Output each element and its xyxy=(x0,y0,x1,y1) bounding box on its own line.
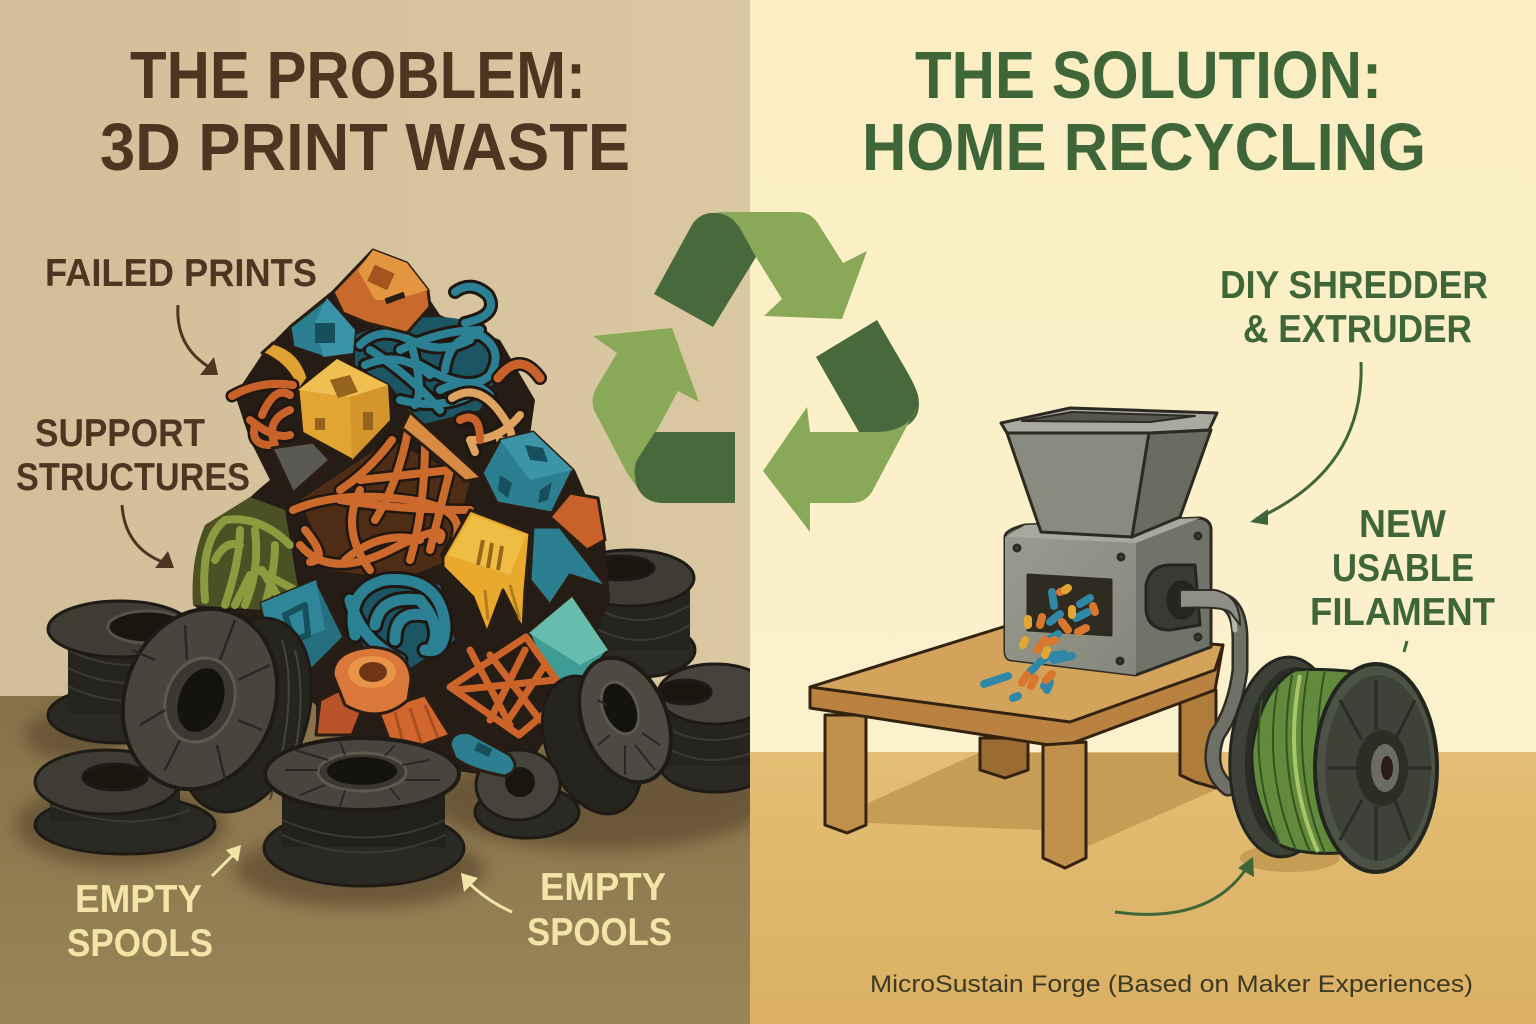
blue underlayer upper xyxy=(355,317,497,425)
panel: problem background xyxy=(0,0,750,1024)
label: failed prints: FAILED PRINTS xyxy=(45,252,317,295)
heading: the solution: HOME RECYCLING xyxy=(862,110,1426,185)
arrow: filament tick xyxy=(1404,641,1407,652)
panel: solution background xyxy=(750,0,1536,1024)
label: support structures: SUPPORT xyxy=(35,412,205,455)
failed print: orange ring xyxy=(316,647,450,755)
label: empty spools right: EMPTY xyxy=(540,866,666,909)
heading: the problem: THE PROBLEM: xyxy=(130,38,586,113)
heading: the solution xyxy=(862,38,1426,185)
orange tangle right xyxy=(452,364,540,452)
hopper xyxy=(1001,408,1217,537)
arrow: empty spools left xyxy=(212,845,241,876)
label: empty spools right: SPOOLS xyxy=(527,911,672,954)
scrap spool ring xyxy=(475,750,579,838)
failed print: blue block xyxy=(261,580,344,670)
orange underlayer xyxy=(300,440,470,580)
arrow: empty spools right xyxy=(461,873,512,912)
failed print: yellow cube xyxy=(298,359,390,460)
arrow: support structures xyxy=(122,505,174,568)
illustration: waste pile xyxy=(15,250,772,908)
illustration: shredder on table xyxy=(810,408,1240,868)
empty spool: tilted large xyxy=(121,608,312,814)
empty spool: back left xyxy=(48,601,193,743)
empty spool: low left xyxy=(35,750,215,854)
heading: the problem xyxy=(100,38,630,185)
label: support structures: STRUCTURES xyxy=(16,456,250,499)
scrap behind ring xyxy=(316,705,318,722)
failed print: blue cube xyxy=(482,432,573,513)
label: empty spools left xyxy=(67,878,213,965)
blue tangle lower xyxy=(350,580,445,660)
label: DIY shredder and extruder: DIY SHREDDER xyxy=(1220,264,1488,307)
output tube xyxy=(1182,596,1240,788)
blue fragment xyxy=(450,732,515,776)
label: new usable filament: NEW xyxy=(1359,503,1446,546)
floor shadows xyxy=(15,710,770,908)
teal drape xyxy=(532,528,603,602)
arrow: shredder xyxy=(1250,362,1361,525)
label: new usable filament: FILAMENT xyxy=(1310,591,1495,634)
failed print: yellow drip cube xyxy=(443,510,530,633)
shredder body xyxy=(1005,518,1211,675)
failed print: dark wedge xyxy=(272,442,330,493)
label: empty spools left: SPOOLS xyxy=(67,922,213,965)
label: empty spools left: EMPTY xyxy=(75,878,202,921)
table shadow xyxy=(868,753,1215,847)
shredded pellets xyxy=(984,588,1095,698)
footer credit: MicroSustain Forge (Based on Maker Experiences) xyxy=(870,971,1473,998)
green support structure xyxy=(192,497,300,610)
blue underlayer lower xyxy=(362,584,455,668)
empty spool: front centre xyxy=(264,738,464,886)
output opening xyxy=(1028,575,1111,635)
output tube end xyxy=(1180,590,1240,625)
empty spool: tilted right xyxy=(540,656,673,816)
arrow: filament spool xyxy=(1115,857,1254,914)
support structure: orange lattice xyxy=(293,412,482,570)
orange tangle left xyxy=(232,384,293,445)
empty spool: back right xyxy=(597,548,696,678)
table xyxy=(810,627,1223,868)
label: DIY shredder and extruder: & EXTRUDER xyxy=(1243,308,1472,351)
heading: the problem: 3D PRINT WASTE xyxy=(100,110,630,185)
illustration: green filament spool xyxy=(1225,654,1437,872)
motor coupling xyxy=(1146,565,1200,630)
support structure: orange lattice block xyxy=(450,637,567,735)
icon: recycling symbol xyxy=(592,212,919,532)
failed print: yellow arc xyxy=(262,343,308,392)
arrow: failed prints xyxy=(178,305,218,375)
label: new usable filament xyxy=(1310,503,1495,634)
failed print: orange cube xyxy=(333,250,430,333)
failed print: red wedge xyxy=(550,493,605,550)
label: new usable filament: USABLE xyxy=(1332,547,1474,590)
failed print: mint block xyxy=(529,597,610,679)
failed print: teal cube xyxy=(290,298,355,357)
label: DIY shredder and extruder xyxy=(1220,264,1488,351)
pile dark mass xyxy=(193,250,610,780)
heading: the solution: THE SOLUTION: xyxy=(915,38,1382,113)
label: support structures xyxy=(16,412,250,499)
label: empty spools right xyxy=(527,866,672,954)
empty spool: far right xyxy=(658,662,750,794)
blue tangle upper xyxy=(360,287,496,410)
